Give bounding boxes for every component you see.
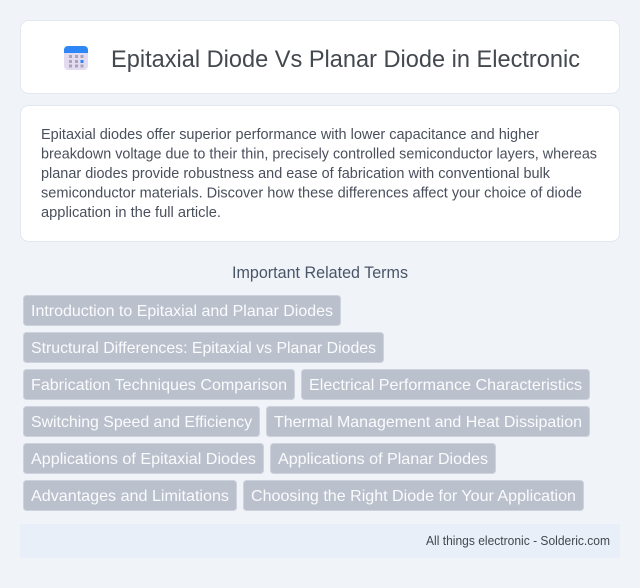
tag: electrical performance: Electrical Performance Characteristics [309,377,582,394]
icon: calendar [64,46,88,70]
tag: introduction [24,296,340,326]
tag: advantages: Advantages and Limitations [31,488,229,505]
tag: structural differences [24,332,384,362]
tag: planar applications: Applications of Planar Diodes [278,451,488,468]
tag: structural differences: Structural Differences: Epitaxial vs Planar Diodes [31,340,376,357]
tag: switching speed [24,406,260,436]
panel: header [20,20,620,94]
summary text: semiconductor materials. Discover how these differences affect your choice of diode [41,186,582,202]
tag: planar applications [270,444,496,474]
footer [20,524,620,558]
footer text: All things electronic - Solderic.com [426,534,610,548]
tag: choosing the right diode: Choosing the Right Diode for Your Application [251,488,576,505]
tag: electrical performance [302,370,590,400]
tag: fabrication: Fabrication Techniques Comparison [31,377,287,394]
summary text: Epitaxial diodes offer superior performance with lower capacitance and higher [41,127,539,143]
tag: choosing the right diode [244,480,584,510]
tag: thermal management [266,406,590,436]
heading: related terms: Important Related Terms [232,264,408,282]
tag: introduction: Introduction to Epitaxial and Planar Diodes [31,303,333,320]
tag: fabrication [24,370,294,400]
tag: switching speed: Switching Speed and Efficiency [31,414,252,431]
tag: advantages [24,480,236,510]
summary text: planar diodes provide robustness and ease of fabrication with conventional bulk [41,166,551,182]
tag: thermal management: Thermal Management and Heat Dissipation [274,414,582,431]
summary text: breakdown voltage due to their thin, precisely controlled semiconductor layers, whereas [41,146,597,162]
tag: epitaxial applications: Applications of Epitaxial Diodes [31,451,256,468]
title: Epitaxial Diode Vs Planar Diode in Electronic [111,46,580,73]
summary text [41,127,597,221]
summary text: application in the full article. [41,205,221,221]
related term tags [24,296,590,510]
panel: summary [20,106,620,242]
tag: epitaxial applications [24,444,264,474]
